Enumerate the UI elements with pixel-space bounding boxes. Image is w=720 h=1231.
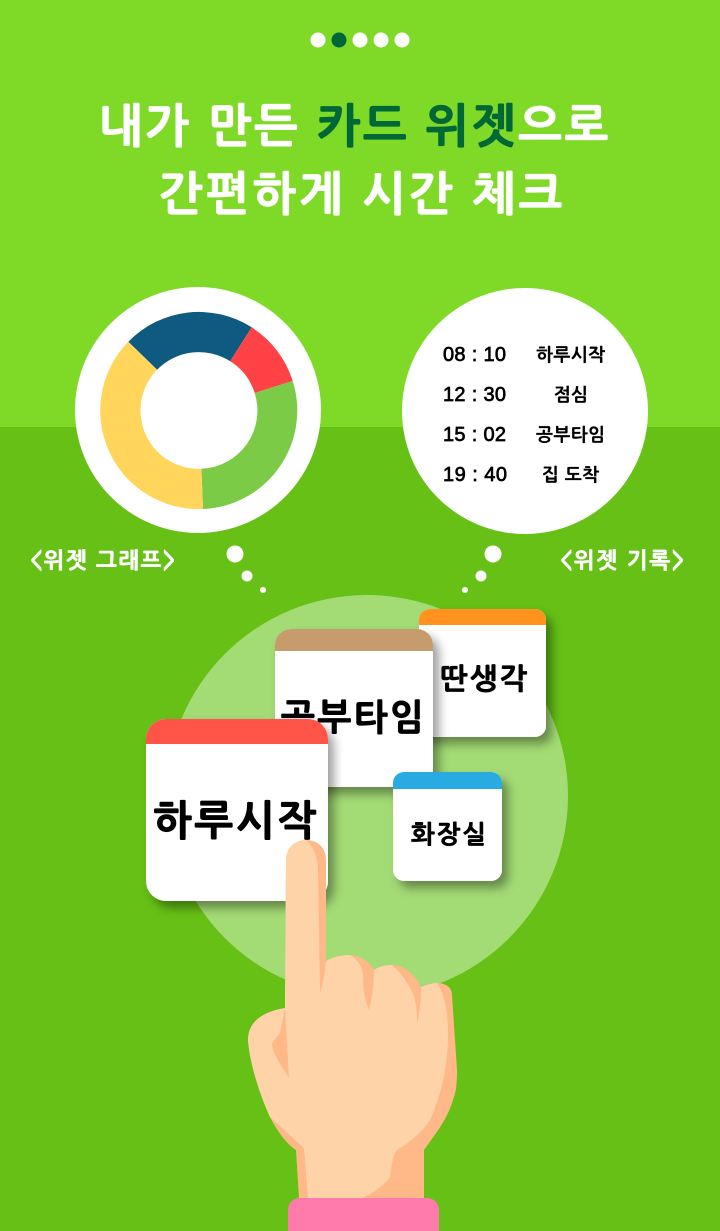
card: 화장실: 화장실 xyxy=(411,821,486,847)
thought bubble dots right xyxy=(462,546,502,593)
icon: pointing hand xyxy=(248,840,457,1231)
card: 딴생각 xyxy=(419,609,546,737)
thought bubble dots left xyxy=(226,546,266,593)
record rows: 08 : 10 xyxy=(443,344,506,366)
donut chart xyxy=(100,312,297,509)
panel: widget record circle xyxy=(402,288,648,534)
large light green circle xyxy=(166,595,568,997)
record rows: 19 : 40 xyxy=(443,464,507,486)
hand light layer xyxy=(248,840,448,1198)
card: 공부타임 xyxy=(275,629,433,787)
thumb crease xyxy=(272,1008,289,1078)
record rows: 하루시작 xyxy=(536,345,605,364)
record rows: 점심 xyxy=(554,385,588,404)
panel: widget graph circle xyxy=(75,287,321,533)
title: 간편하게 시간 체크 xyxy=(159,171,562,217)
card: 공부타임: 공부타임 xyxy=(281,699,424,736)
label: widget record: <위젯 기록> xyxy=(560,548,684,572)
record rows: 15 : 02 xyxy=(443,424,506,446)
card: 화장실 xyxy=(393,772,502,881)
card: 하루시작 xyxy=(146,719,328,901)
record rows: 집 도착 xyxy=(542,465,599,484)
title: 내가 만든 카드 위젯으로 xyxy=(99,103,608,149)
page indicator dots xyxy=(310,32,410,48)
record rows: 공부타임 xyxy=(536,425,605,444)
title xyxy=(99,103,608,217)
card: 딴생각: 딴생각 xyxy=(440,664,527,694)
card: 하루시작: 하루시작 xyxy=(153,800,316,842)
background top band xyxy=(0,0,720,427)
sleeve cuff xyxy=(288,1198,439,1231)
record rows xyxy=(443,344,605,486)
label: widget graph: <위젯 그래프> xyxy=(30,548,175,572)
hand shadow layer xyxy=(248,840,457,1198)
background bottom band xyxy=(0,427,720,1231)
record rows: 12 : 30 xyxy=(443,384,506,406)
